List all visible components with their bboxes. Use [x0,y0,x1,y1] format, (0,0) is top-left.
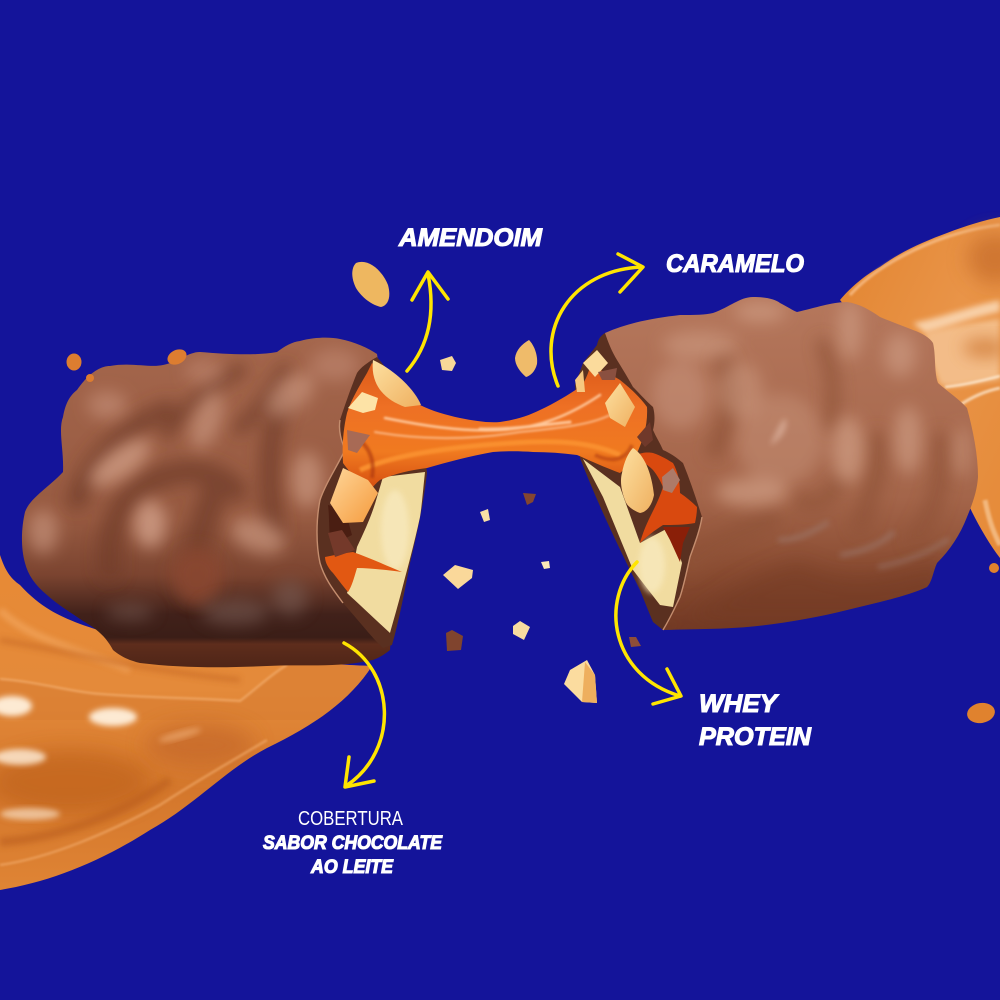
caramel swirl: left [0,550,380,895]
crust [317,357,427,648]
arrow: cobertura [344,643,384,787]
label: amendoim: AMENDOIM [398,224,543,252]
label: whey protein: PROTEIN [699,723,812,751]
dark caramel drip [663,527,690,562]
floating peanuts and crumbs [66,262,999,725]
cake [583,459,682,607]
caramel spike [633,452,697,543]
label: cobertura: COBERTURA [298,808,404,830]
bar: left half [22,338,400,667]
label: whey protein: WHEY [699,690,779,718]
arrow: caramelo [551,254,643,386]
peanuts and chunks in bar [328,350,680,557]
label: whey protein [699,690,812,751]
crust [575,333,702,630]
bar: right break interior [575,333,702,630]
arrow: whey protein [616,562,681,704]
cake [347,472,425,633]
ridges and highlights [28,349,359,561]
label: cobertura: AO LEITE [310,857,394,878]
arrow: amendoim [407,272,448,371]
bar: right half [600,297,978,640]
valleys [77,370,285,590]
caramel pool [325,552,402,592]
caramel swirl: right [840,217,1000,558]
bar: left break interior [317,357,427,648]
caramel stretch [343,363,647,490]
label: cobertura: SABOR CHOCOLATE [263,833,443,854]
label: cobertura [263,808,443,878]
label: caramelo: CARAMELO [666,250,805,278]
